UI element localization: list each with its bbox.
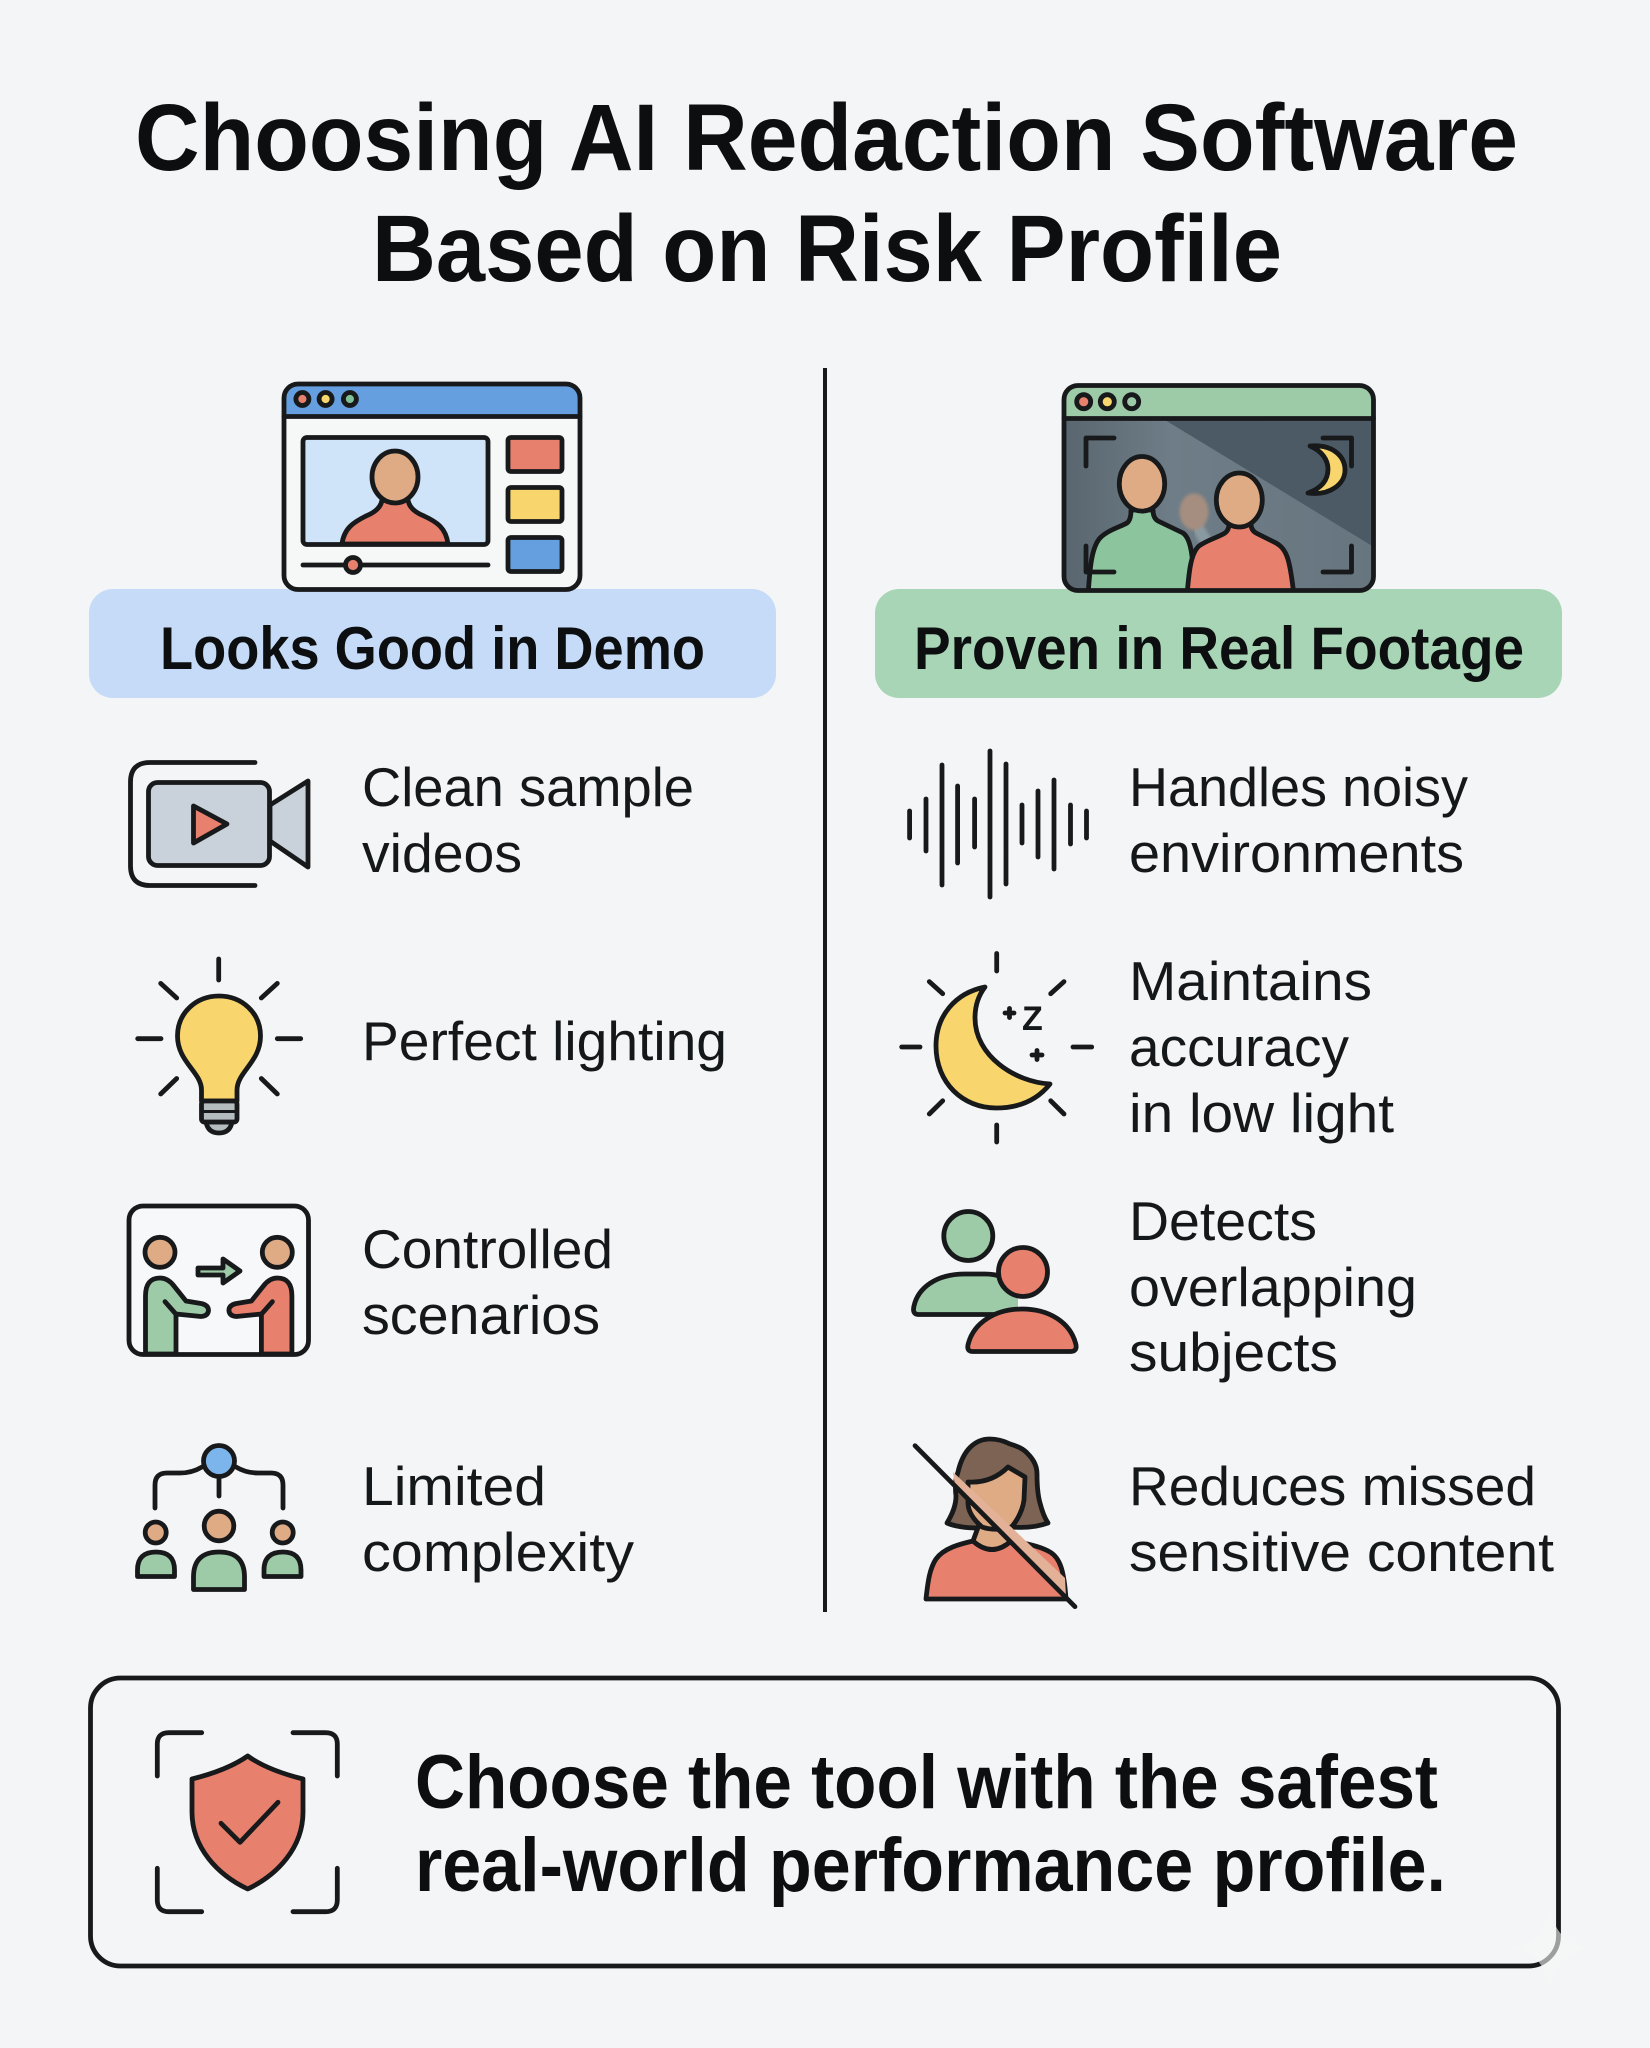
- icon: team hierarchy: [138, 1446, 301, 1590]
- item: maintains accuracy in low light: accuracy: [1129, 1016, 1349, 1078]
- item: handles noisy environments: [910, 751, 1468, 897]
- item: maintains accuracy in low light: Maintains: [1129, 950, 1372, 1012]
- icon: real footage window: [1064, 385, 1374, 596]
- item: handles noisy environments: Handles noisy: [1129, 756, 1468, 818]
- item: clean sample videos: videos: [362, 822, 522, 884]
- icon: video camera: [130, 762, 308, 886]
- item: limited complexity: complexity: [362, 1521, 635, 1583]
- item: limited complexity: [138, 1446, 635, 1590]
- item: detects overlapping subjects: [914, 1190, 1417, 1383]
- icon: crossed-out person: [915, 1439, 1075, 1607]
- title: Based on Risk Profile: [372, 196, 1282, 302]
- heading pill: proven in real footage: [875, 589, 1562, 698]
- icon: light bulb: [138, 959, 301, 1133]
- item: perfect lighting: [138, 959, 727, 1133]
- item: controlled scenarios: Controlled: [362, 1218, 613, 1280]
- item: limited complexity: Limited: [362, 1455, 546, 1517]
- item: controlled scenarios: scenarios: [362, 1284, 600, 1346]
- callout: conclusion: [90, 1678, 1558, 1966]
- item: clean sample videos: Clean sample: [362, 756, 694, 818]
- item: reduces missed sensitive content: sensitive content: [1129, 1521, 1554, 1583]
- item: maintains accuracy in low light: [902, 950, 1394, 1144]
- heading pill: proven in real footage: Proven in Real Footage: [914, 615, 1524, 682]
- panel: proven in real footage: [875, 385, 1562, 1607]
- item: maintains accuracy in low light: in low light: [1129, 1082, 1394, 1144]
- icon: crescent moon: Z: [1022, 1000, 1043, 1038]
- icon: two people exchanging: [129, 1206, 308, 1354]
- item: controlled scenarios: [129, 1206, 613, 1354]
- item: detects overlapping subjects: Detects: [1129, 1190, 1317, 1252]
- icon: crescent moon: [902, 954, 1092, 1142]
- item: reduces missed sensitive content: Reduces missed: [1129, 1455, 1536, 1517]
- item: detects overlapping subjects: subjects: [1129, 1321, 1338, 1383]
- heading pill: looks good in demo: [89, 589, 776, 698]
- title: [135, 85, 1518, 302]
- title: Choosing AI Redaction Software: [135, 85, 1518, 191]
- item: reduces missed sensitive content: [915, 1439, 1554, 1607]
- watermark sparkle: [1510, 1905, 1593, 1992]
- icon: sound waveform: [910, 751, 1086, 897]
- callout: conclusion: Choose the tool with the safest: [415, 1740, 1438, 1825]
- item: detects overlapping subjects: overlapping: [1129, 1256, 1417, 1318]
- item: handles noisy environments: environments: [1129, 822, 1464, 884]
- icon: shield with check in scan frame: [157, 1733, 337, 1912]
- item: perfect lighting: Perfect lighting: [362, 1010, 727, 1072]
- icon: overlapping people: [914, 1212, 1076, 1352]
- callout: conclusion: real-world performance profile.: [415, 1823, 1446, 1908]
- panel: looks good in demo: [89, 384, 776, 1590]
- heading pill: looks good in demo: Looks Good in Demo: [160, 615, 705, 682]
- item: clean sample videos: [130, 756, 694, 886]
- icon: demo browser window: [284, 384, 580, 590]
- center divider: [823, 368, 827, 1612]
